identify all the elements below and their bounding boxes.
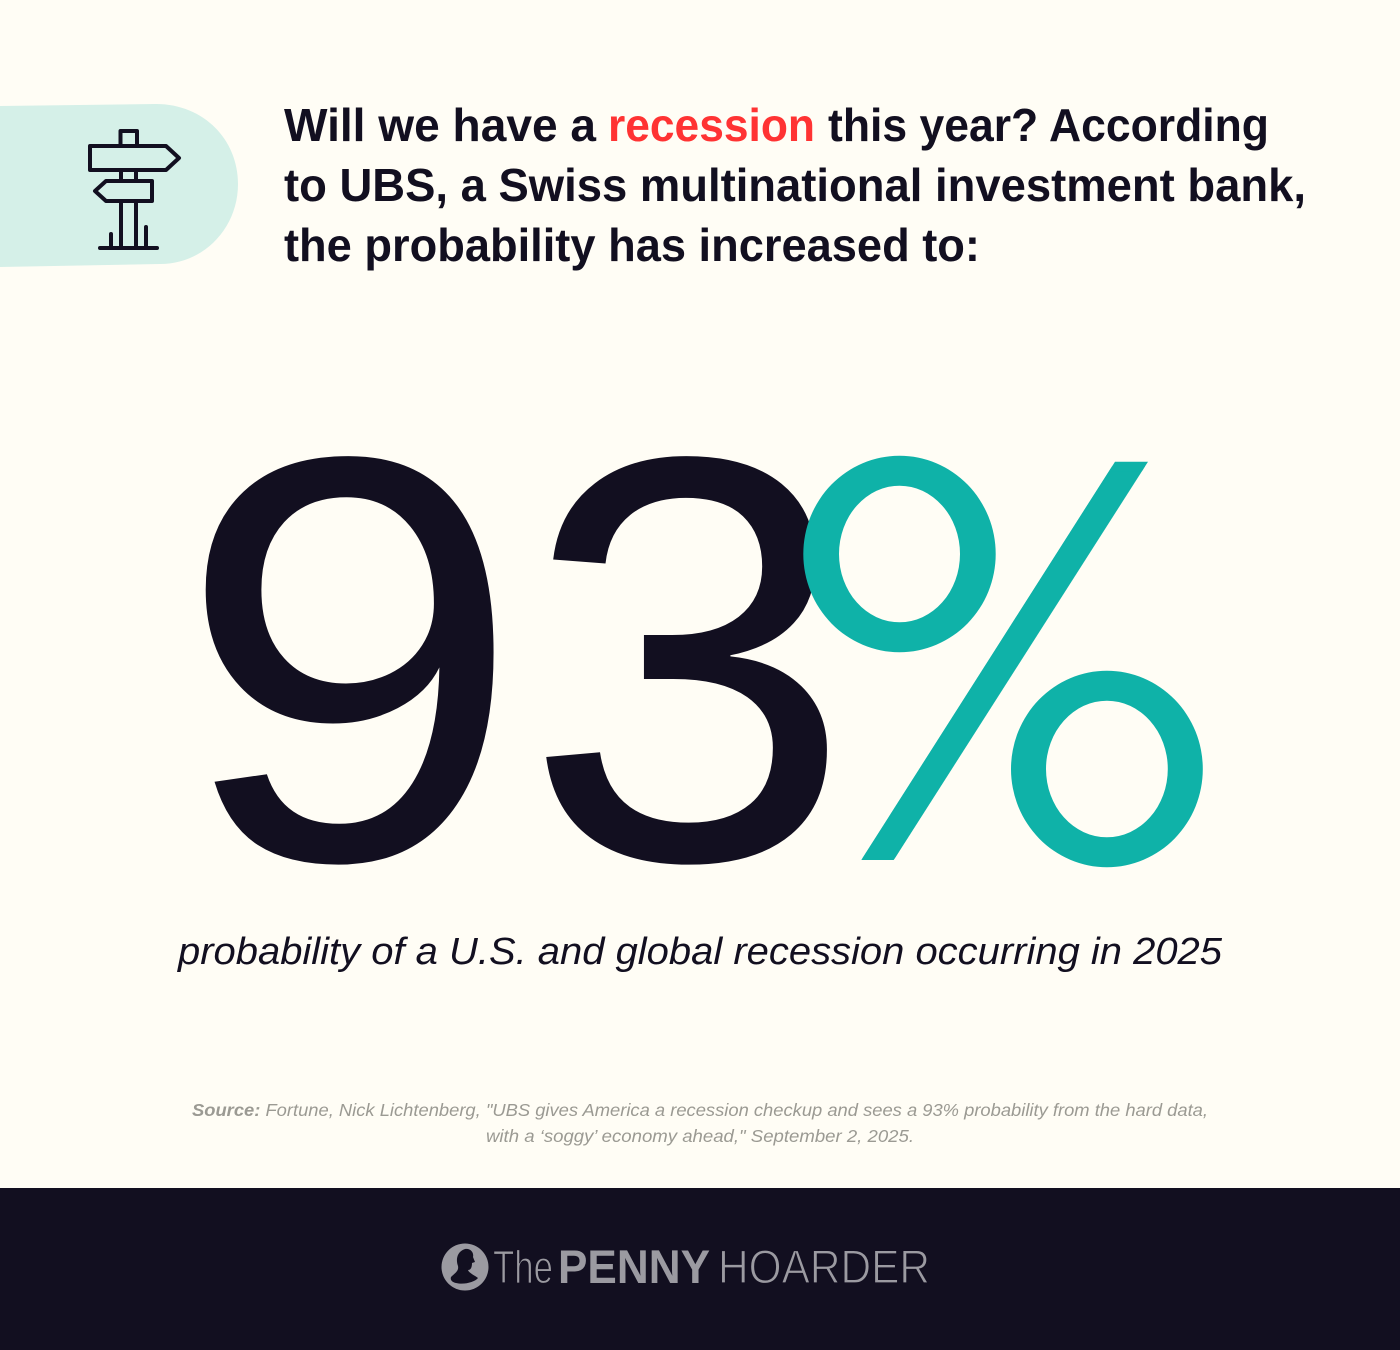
heading: recession bbox=[608, 99, 815, 151]
source note bbox=[192, 1100, 1208, 1146]
source note: Source: Fortune, Nick Lichtenberg, "UBS gives America a recession checkup and sees a 93% probability from the hard data, bbox=[192, 1100, 1208, 1120]
source note: with a ‘soggy’ economy ahead," September 2, 2025. bbox=[486, 1126, 914, 1146]
logo: The Penny Hoarder: PENNY bbox=[558, 1240, 710, 1293]
logo: The Penny Hoarder: HOARDER bbox=[718, 1240, 930, 1293]
heading: Will we have a bbox=[284, 99, 596, 151]
subtitle: probability of a U.S. and global recession occurring in 2025 bbox=[177, 931, 1223, 973]
logo: The Penny Hoarder bbox=[442, 1240, 930, 1293]
heading: the probability has increased to: bbox=[284, 219, 980, 271]
logo: The Penny Hoarder: The bbox=[493, 1241, 553, 1293]
heading: this year? According bbox=[828, 99, 1269, 151]
footer band bbox=[0, 1188, 1400, 1350]
big number: 93%: 3 bbox=[524, 337, 853, 981]
big number: 93%: % bbox=[757, 343, 1251, 980]
big number: 93%: 9 bbox=[176, 337, 523, 982]
icon: signpost bbox=[90, 131, 179, 248]
logo icon: coin with silhouette bbox=[442, 1244, 488, 1290]
heading bbox=[284, 99, 1306, 271]
heading: to UBS, a Swiss multinational investment bank, bbox=[284, 159, 1306, 211]
big number: 93% bbox=[176, 337, 1251, 982]
icon panel: mint pill bbox=[0, 104, 238, 267]
